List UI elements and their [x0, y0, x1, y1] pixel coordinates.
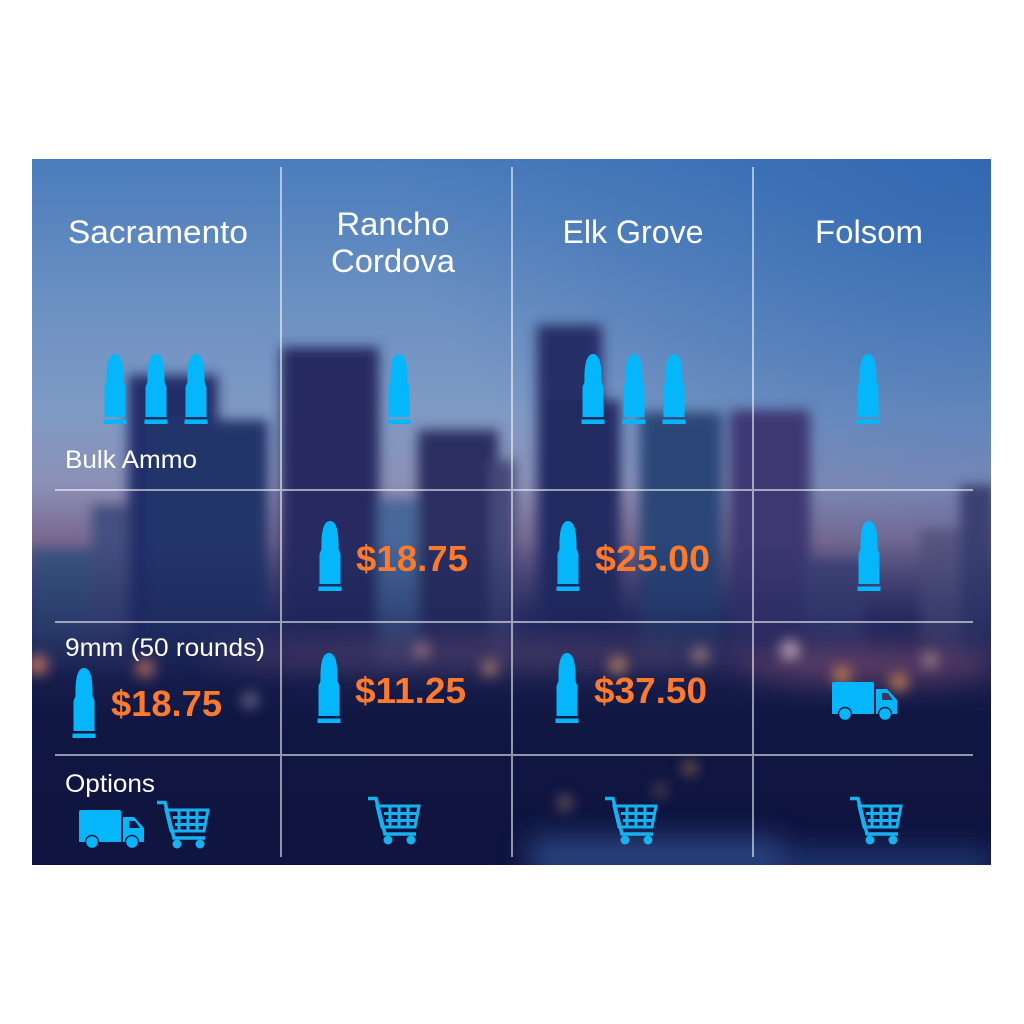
price: $18.75 Rancho Cordova: $18.75 [356, 538, 468, 579]
icon: bullet, Folsom bulk [856, 354, 880, 424]
icon: shopping cart, Rancho Cordova [368, 798, 419, 844]
price: $11.25 Rancho Cordova: $11.25 [355, 670, 466, 711]
grid lines [55, 167, 973, 857]
icon: delivery truck, Sacramento [79, 810, 144, 848]
heading: Sacramento: Sacramento [68, 214, 248, 250]
heading: Rancho Cordova [331, 206, 455, 279]
heading: Rancho Cordova: Cordova [331, 243, 455, 279]
label: Bulk Ammo: Bulk Ammo [65, 446, 197, 474]
price: $18.75 Sacramento: $18.75 [111, 683, 222, 724]
icons: three bullets, Sacramento [104, 354, 208, 424]
icon: bullet, Folsom row 2 [858, 521, 880, 591]
icon: bullet, Elk Grove row 3 [556, 653, 578, 723]
label: Options: Options [65, 770, 155, 798]
price: $37.50 Elk Grove: $37.50 [594, 670, 707, 711]
icons: three bullets, Elk Grove [582, 354, 686, 424]
icon: bullet, Rancho Cordova bulk [388, 354, 410, 424]
price: $25.00 Elk Grove: $25.00 [595, 538, 710, 579]
icon: bullet, Rancho Cordova row 3 [318, 653, 340, 723]
icon: delivery truck, Folsom [832, 682, 897, 720]
icon: shopping cart, Folsom [850, 798, 901, 844]
icon: bullet, Elk Grove row 2 [556, 521, 580, 591]
icon: shopping cart, Sacramento [157, 802, 208, 848]
icon: bullet, Sacramento row 3 [72, 668, 96, 738]
icon: bullet, Rancho Cordova row 2 [318, 521, 342, 591]
heading: Elk Grove: Elk Grove [562, 214, 704, 250]
label: 9mm (50 rounds): 9mm (50 rounds) [65, 634, 265, 662]
heading: Folsom: Folsom [815, 214, 923, 250]
icon: shopping cart, Elk Grove [605, 798, 656, 844]
panel: blurred city skyline background [29, 159, 1000, 878]
heading: Rancho Cordova: Rancho [336, 206, 450, 242]
